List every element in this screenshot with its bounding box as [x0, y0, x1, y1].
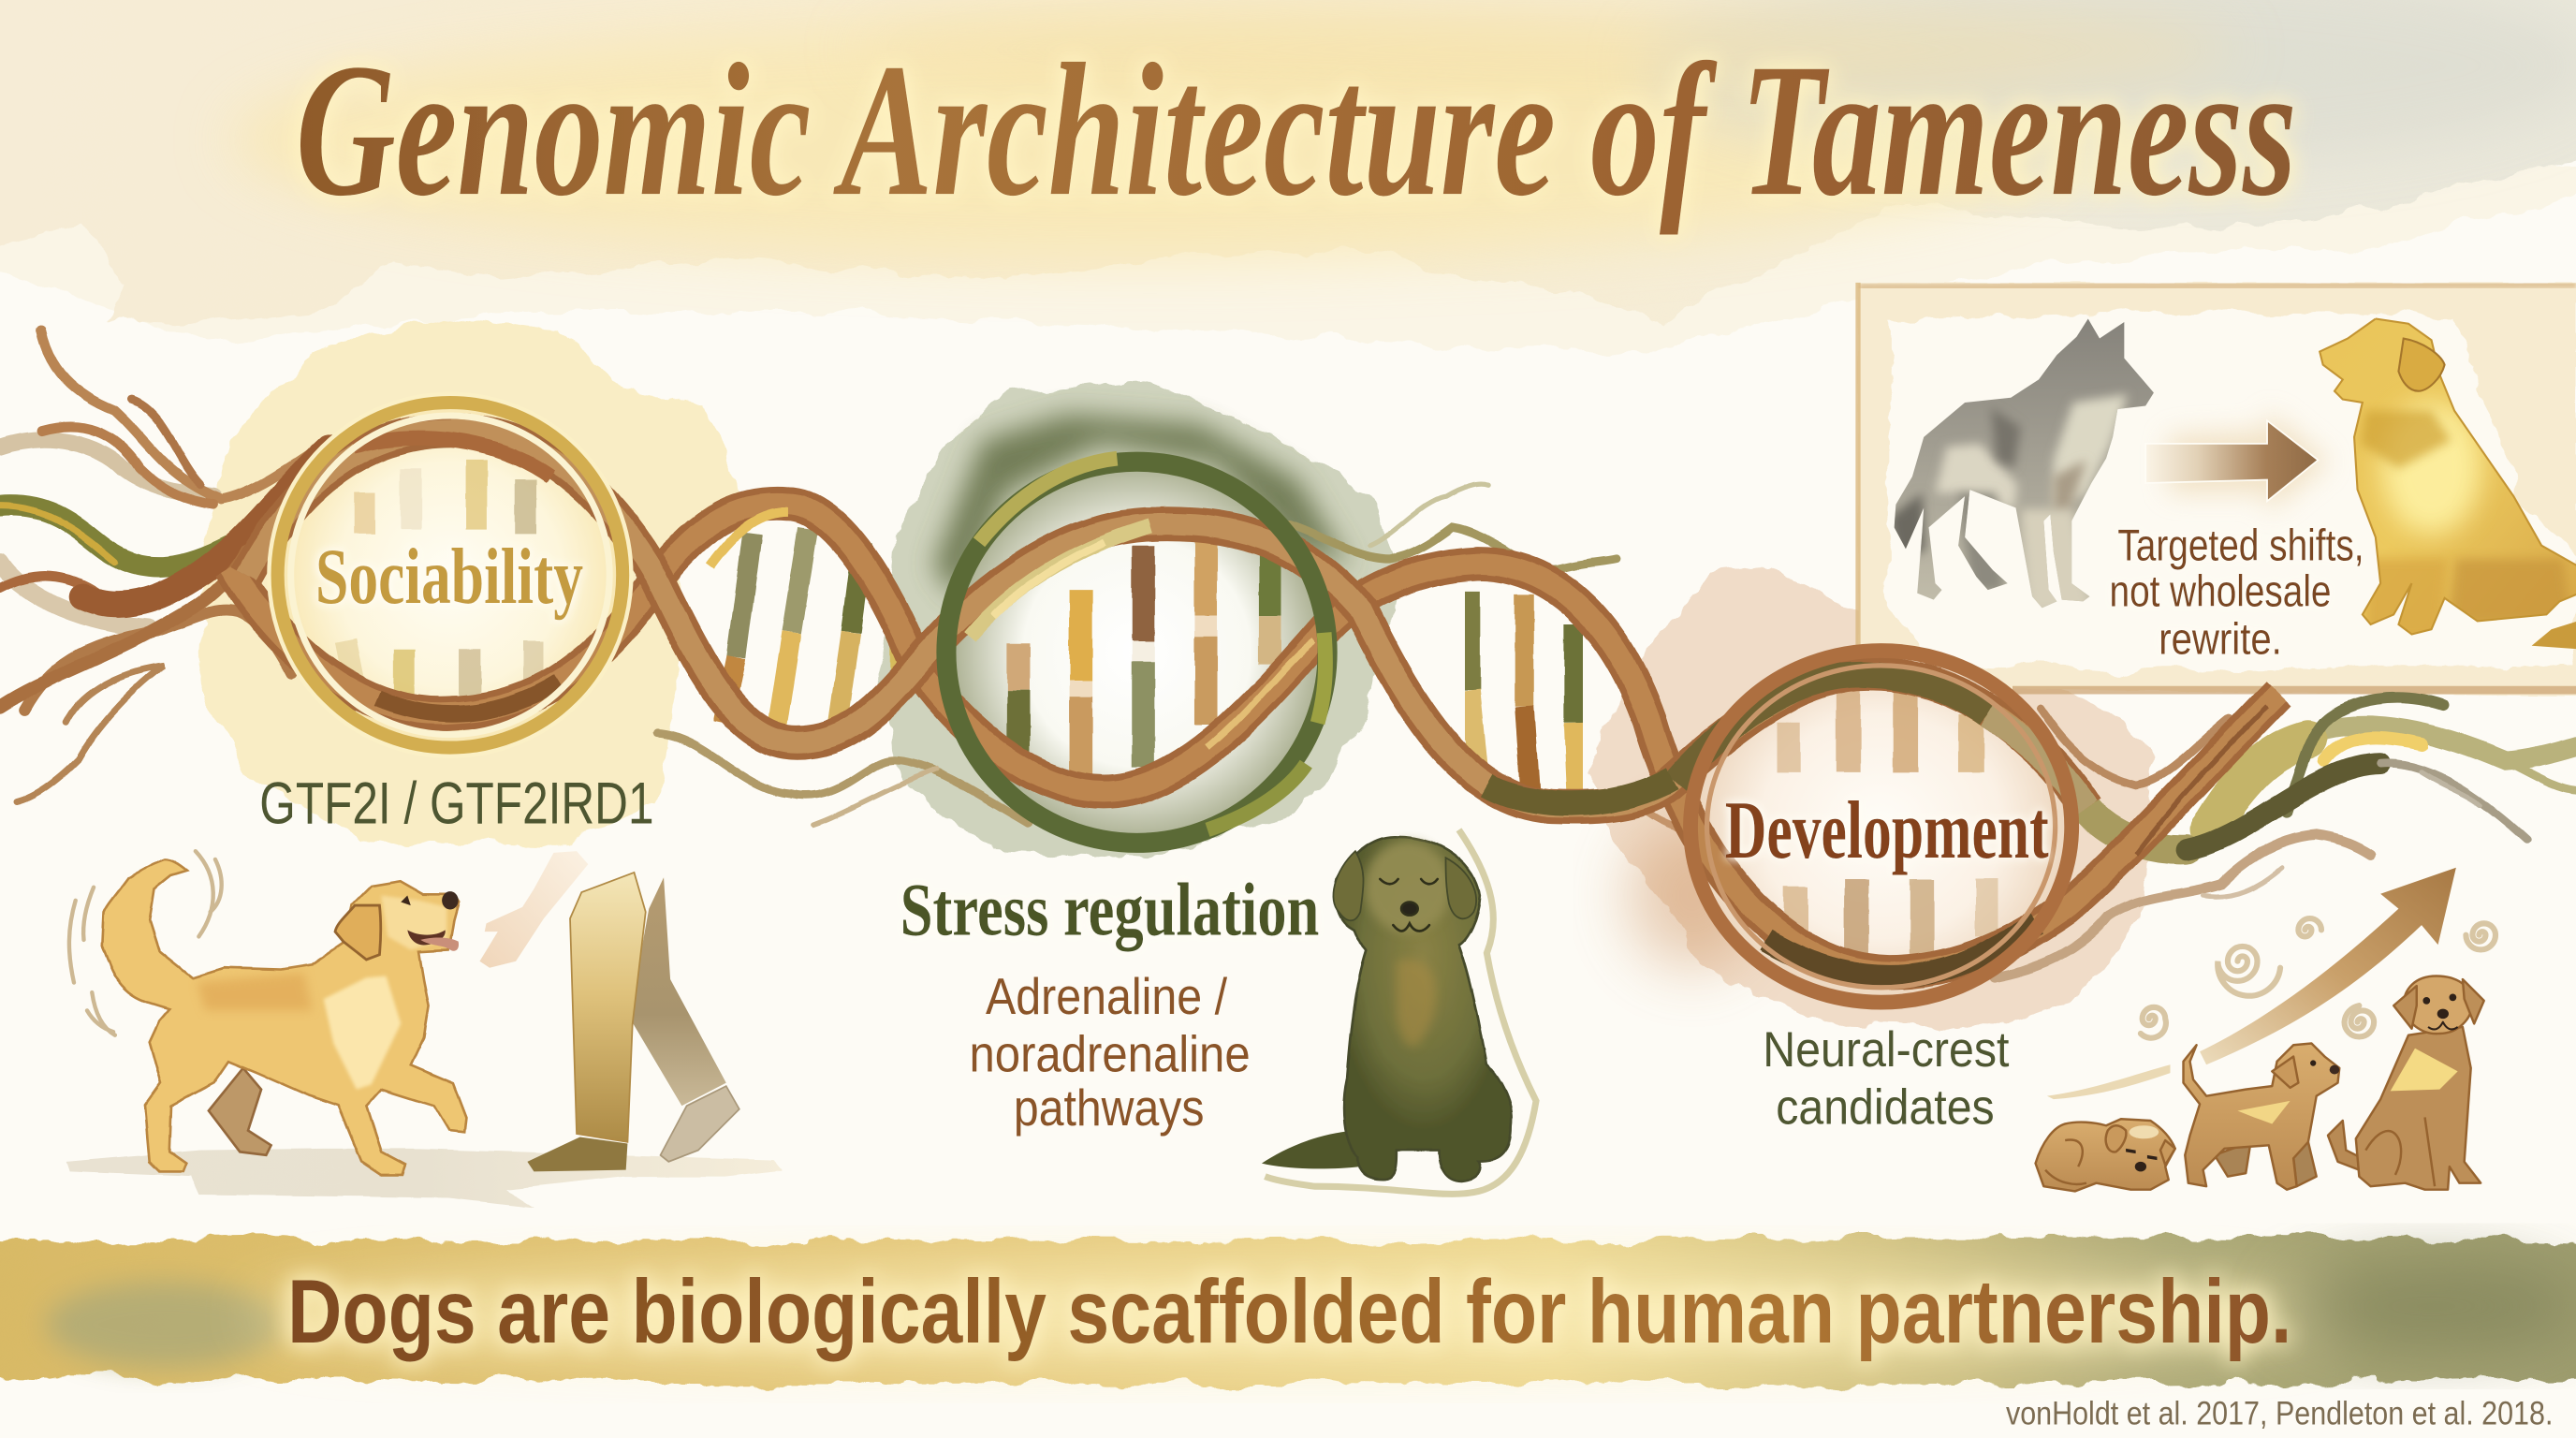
head tone: [1365, 842, 1451, 933]
lying puppy: [2036, 1119, 2175, 1191]
text: targeted shifts: [2110, 521, 2364, 665]
standing puppy: [2184, 1043, 2339, 1190]
text: targeted shifts: rewrite.: [2159, 615, 2282, 665]
label: Development: Development: [1725, 785, 2049, 875]
body: [1335, 836, 1512, 1181]
top watercolor wash: [0, 0, 2576, 353]
arrow: [2145, 411, 2330, 513]
shoes: [527, 1086, 739, 1171]
label: GTF2I / GTF2IRD1: GTF2I / GTF2IRD1: [259, 770, 654, 836]
human leg front: [570, 873, 646, 1142]
left roots: [0, 330, 329, 801]
spirals: [2141, 918, 2496, 1038]
text: targeted shifts: Targeted shifts,: [2117, 521, 2364, 570]
ring: sociability: [270, 394, 631, 756]
circle 3 interior: [1695, 654, 2067, 999]
human leg back: [629, 877, 726, 1106]
face: [1380, 879, 1438, 932]
illustration: golden dog greeting: [66, 851, 782, 1208]
ring: stress regulation: [946, 459, 1327, 843]
sitting dog: [2328, 976, 2484, 1190]
icon: golden dog: [2308, 312, 2576, 649]
tail: [1262, 1131, 1360, 1168]
ground shadow: [66, 1149, 782, 1208]
text: adrenaline pathways: noradrenaline: [970, 1025, 1251, 1082]
right roots: [1995, 697, 2576, 977]
motion lines: [69, 851, 222, 1035]
wash: sociability yellow: [198, 315, 739, 846]
icon: wolf: [1889, 312, 2160, 616]
chest mark: [1397, 960, 1436, 1047]
far hind leg: [209, 1068, 271, 1155]
loop 2 rungs: [723, 529, 900, 740]
illustration: puppy growth: [2036, 868, 2496, 1191]
text: adrenaline pathways: Adrenaline /: [986, 968, 1228, 1025]
circle 1 interior: [279, 403, 621, 748]
chest highlight: [324, 976, 401, 1090]
label: Sociability: Sociability: [315, 534, 583, 621]
illustration: calm olive dog: [1262, 829, 1536, 1194]
panel frame: [1858, 283, 2576, 697]
halo: [1265, 829, 1536, 1194]
dog body: [102, 859, 466, 1175]
ears: [1333, 851, 1476, 920]
text: neural-crest candidates: candidates: [1776, 1079, 1995, 1135]
face: [401, 891, 459, 951]
wash: development peach: [1586, 567, 2152, 1027]
circle 3 rungs: [1788, 687, 1988, 961]
bottom banner: [0, 1238, 2576, 1386]
circle 1 rungs: [345, 460, 534, 703]
text: neural-crest candidates: [1763, 1022, 2010, 1135]
text: neural-crest candidates: Neural-crest: [1763, 1022, 2010, 1078]
DNA helix: [0, 330, 2576, 1003]
label: Stress regulation: Stress regulation: [900, 869, 1319, 952]
hand: [479, 851, 588, 968]
text: adrenaline pathways: pathways: [1014, 1079, 1204, 1137]
wash: stress regulation green: [879, 381, 1405, 858]
back shading: [198, 973, 312, 1010]
middle tendrils: [657, 484, 1741, 838]
ring: development: [1690, 651, 2071, 1003]
ear: [335, 905, 381, 960]
head highlight: [381, 896, 446, 949]
circle 2 rungs: [1018, 534, 1270, 777]
helix strands: [230, 431, 2278, 976]
panel: wolf to dog: [1858, 283, 2576, 697]
text: adrenaline pathways: [970, 968, 1251, 1137]
circle 2 interior: [948, 462, 1325, 843]
growth arrow: [2047, 868, 2456, 1099]
text: targeted shifts: not wholesale: [2110, 567, 2331, 617]
loop 3 rungs: [1471, 592, 1577, 805]
